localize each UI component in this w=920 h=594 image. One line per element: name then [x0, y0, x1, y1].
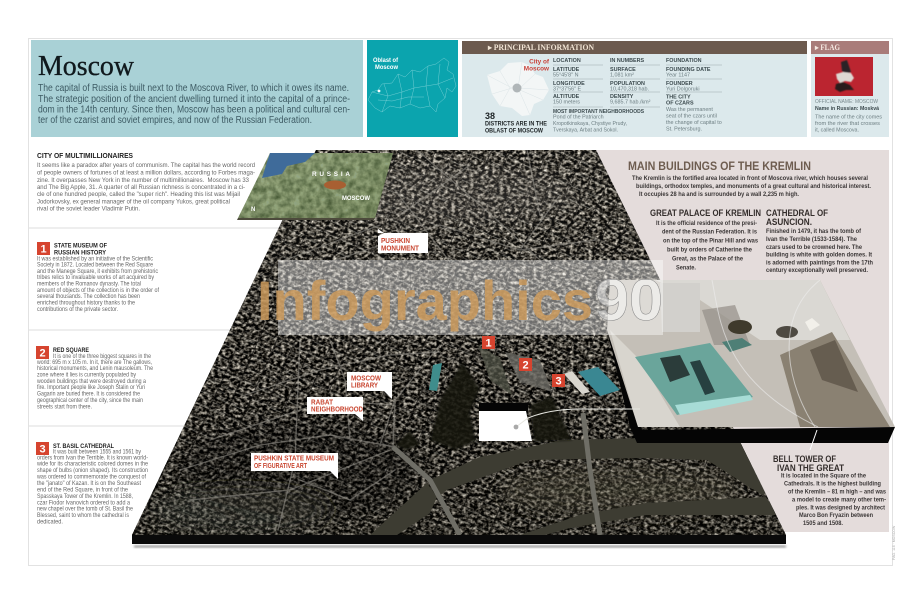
text block: state museum of Russian history: It was established by an initiative of the Scientific — [37, 256, 153, 262]
column: in numbers: 1,081 km² — [610, 72, 634, 78]
column: location: Tverskaya, Arbat and Sokol. — [553, 128, 618, 134]
map label: Moscow Library: MOSCOW — [351, 376, 381, 382]
map base block — [132, 535, 786, 548]
column: in numbers: 10,470,318 hab. — [610, 86, 649, 92]
heading bar: ▸ FLAG — [814, 43, 840, 52]
map marker 3 — [552, 374, 565, 388]
water — [262, 153, 315, 178]
map: oblast of Moscow districts: City of — [529, 58, 550, 66]
text block: Cathedral of Asuncion: building is white with golden domes. It — [766, 252, 873, 258]
text block: Great Palace of Kremlin: built by orders of Catherine the — [667, 246, 752, 254]
text block: city of multimillionaires: It seems like a paradox after years of communism. The capital has the world record — [37, 162, 255, 169]
Cathedral cluster — [728, 320, 752, 334]
text block: red square: streets start from there. — [37, 404, 92, 410]
text block: state museum of Russian history: enriched throughout history thanks to the — [37, 300, 136, 306]
text block: city of multimillionaires — [37, 151, 255, 212]
panel: oblast of Moscow locator map — [367, 40, 458, 137]
text block: city of multimillionaires: rival of the soviet leader Vladimir Putin. — [37, 206, 140, 212]
text block: red square: Gagarin are buried there. It is considered the — [37, 392, 141, 398]
heading bar: ▸ PRINCIPAL INFORMATION — [487, 43, 594, 52]
text block: state museum of Russian history: contributions of the private sector. — [37, 307, 118, 313]
column: in numbers: IN NUMBERS — [610, 58, 645, 64]
text block: St. Basil cathedral: shape of bulbs (onion shaped). Its construction — [37, 468, 148, 474]
text block: St. Basil cathedral: orders from Ivan the Terrible. It is known world- — [37, 456, 148, 462]
text block: Great Palace of Kremlin: GREAT PALACE OF KREMLIN — [650, 208, 761, 218]
panel: oblast of Moscow locator map: Oblast of — [373, 58, 399, 64]
text block: Great Palace of Kremlin: dent of the Russian Federation. It is — [662, 228, 757, 236]
text block: red square — [36, 346, 154, 410]
map label: Pushkin State Museum: OF FIGURATIVE ART — [254, 463, 308, 470]
flag text: The name of the city comes — [815, 114, 882, 120]
map label: Pushkin Monument: PUSHKIN — [381, 238, 410, 245]
text block: city of multimillionaires: zine. It overpasses New York in the number of multimillionaires. Moscow has 33 — [37, 177, 249, 184]
map marker 2 — [519, 358, 532, 372]
map marker 3: 3 — [555, 376, 562, 388]
inset black side — [607, 330, 895, 443]
text block: St. Basil cathedral: czar Fiodor Ivanovich ordered to add a — [37, 500, 131, 506]
map label: Pushkin State Museum — [251, 453, 338, 479]
text block: Bell Tower of Ivan the Great: ples. It was designed by architect — [796, 504, 886, 512]
text block: state museum of Russian history: and the Manege Square, it exhibits from prehistoric — [37, 269, 158, 275]
column: in numbers: POPULATION — [610, 81, 645, 87]
text block: Cathedral of Asuncion: is adorned with paintings from the 17th — [766, 260, 873, 266]
text block: St. Basil cathedral — [36, 442, 149, 526]
districts count: OBLAST OF MOSCOW — [485, 128, 543, 134]
map: oblast of Moscow districts — [487, 58, 550, 116]
text block: Cathedral of Asuncion: Finished in 1479, it has the tomb of — [766, 228, 862, 235]
column: location: 150 meters — [553, 100, 580, 106]
flag text: OFFICIAL NAME: MOSCOW — [815, 99, 879, 105]
text block: state museum of Russian history: Society in 1872. Located between the Red Square — [37, 262, 154, 268]
text block: Cathedral of Asuncion: CATHEDRAL OF — [766, 208, 828, 218]
icon: number 2: 2 — [39, 348, 46, 360]
text block: Bell Tower of Ivan the Great: of the Kremlin – 81 m high – and was — [788, 488, 886, 496]
intro text: ter of the czarist and soviet empires, and now of the Russian Federation. — [38, 115, 312, 126]
text block: city of multimillionaires: cle of one hundred people, called the "super rich". Heading this list was Mijail — [37, 191, 240, 198]
column: foundation: FOUNDATION — [666, 58, 702, 64]
text block: Kremlin intro: The Kremlin is the fortified area located in front of Moscova river, which houses several — [632, 175, 868, 182]
column: location: 55°45′8″ N — [553, 72, 579, 78]
text block: St. Basil cathedral: wide for its characteristic colored domes in the — [36, 462, 149, 468]
watermark: Infographics — [257, 269, 593, 332]
map label: Pushkin Monument — [378, 229, 428, 253]
text block: state museum of Russian history: RUSSIAN HISTORY — [54, 250, 107, 256]
text block: Kremlin intro: It occupies 28 ha and is surrounded by a wall 2,235 m high. — [639, 191, 799, 198]
intro text: The capital of Russia is built next to the Moscova River, to which it owes its name. — [38, 83, 349, 94]
heading bar — [462, 41, 807, 54]
map label: Pushkin State Museum: PUSHKIN STATE MUSEUM — [254, 456, 334, 462]
icon: Moscow flag — [815, 57, 873, 96]
streets — [180, 150, 596, 530]
column: foundation — [666, 58, 722, 132]
text block: St. Basil cathedral: dedicated. — [37, 520, 63, 526]
watermark — [257, 245, 663, 335]
watermark: 90 — [595, 268, 663, 333]
watermark: Infographics — [268, 245, 608, 308]
text block: Cathedral of Asuncion — [766, 208, 873, 274]
text block: Kremlin intro — [632, 175, 871, 198]
column: foundation: OF CZARS — [666, 100, 694, 106]
intro text — [38, 83, 350, 126]
column: foundation: Year 1147 — [666, 72, 690, 78]
text block: Bell Tower of Ivan the Great: Marco Bon Fryazin between — [799, 512, 873, 519]
text block: Bell Tower of Ivan the Great: BELL TOWER OF — [773, 454, 836, 464]
header panel: intro — [31, 40, 363, 137]
Russia location inset — [236, 150, 396, 220]
column: foundation: Yuri Dolgoruki — [666, 86, 700, 92]
text block: state museum of Russian history: members of the Romanov dynasty. The total — [37, 282, 141, 288]
text block: state museum of Russian history: tribes relics to invaluable works of art acquired by — [37, 275, 154, 281]
icon: number 1: 1 — [40, 244, 47, 256]
text block: city of multimillionaires: Jodorkovsky, ex general manager of the oil company Yukos, great political — [37, 198, 230, 206]
text block: city of multimillionaires: of people owners of fortunes of at least a million dollars, according to Forbes maga- — [37, 170, 255, 176]
map label: Moscow Library — [347, 372, 392, 399]
text block: St. Basil cathedral: was ordered to commemorate the conquest of — [36, 474, 146, 480]
icon: number 3: 3 — [39, 444, 46, 456]
Great Palace green roofs — [635, 338, 753, 415]
icon: Russia outline map — [368, 58, 456, 112]
map label: Pushkin Monument: MONUMENT — [381, 246, 420, 252]
column: location: 37°37′56″ E — [553, 86, 582, 92]
text block: Cathedral of Asuncion: Ivan the Terrible (1533-1584). The — [766, 236, 857, 243]
text block: Bell Tower of Ivan the Great: Cathedrals. It is the highest building — [784, 480, 881, 488]
column: location: ALTITUDE — [553, 94, 580, 100]
column: in numbers: 9,685.7 hab./km² — [610, 100, 651, 106]
intro text: dom in the 14th century. Since then, Moscow has been a political and cultural cen- — [38, 104, 350, 116]
bridges — [393, 413, 600, 535]
Kremlin aerial inset — [600, 280, 900, 443]
column: in numbers: DENSITY — [610, 94, 634, 100]
text block: St. Basil cathedral: Blessed, saint to whom the cathedral is — [37, 513, 129, 519]
text block: state museum of Russian history: amount of objects of the collection is in the order of — [37, 288, 159, 294]
text block: Bell Tower of Ivan the Great — [773, 454, 886, 527]
text block: red square: world: 695 m x 105 m. In it, there are The gallows, — [36, 360, 152, 366]
column: location: LONGITUDE — [553, 81, 585, 87]
text block: red square: historical monuments, and Lenin mausoleum. The — [37, 366, 154, 372]
text block: red square: zone where it lies is currently populated by — [37, 372, 136, 378]
flag text — [815, 99, 882, 134]
panel: principal information — [462, 41, 807, 137]
text block: red square: fire. Important people like Joseph Stalin or Yuri — [37, 385, 145, 391]
map label: Rabat neighborhood: NEIGHBORHOOD — [311, 406, 363, 414]
pools and teal roofs — [429, 363, 620, 396]
column: location: LATITUDE — [553, 67, 580, 73]
map marker 1 — [482, 336, 495, 350]
text block: St. Basil cathedral: new chapel over the tomb of St. Basil the — [37, 506, 134, 512]
text block: St. Basil cathedral: Spasskaya Tower of the Kremlin. In 1588, — [37, 494, 133, 500]
column: foundation: FOUNDING DATE — [666, 67, 711, 73]
text block: St. Basil cathedral: end of the Red Square, in front of the — [37, 488, 129, 494]
label: Moscow: MOSCOW — [342, 196, 370, 202]
flag text: from the river that crosses — [815, 121, 880, 127]
text block: St. Basil cathedral: ST. BASIL CATHEDRAL — [53, 443, 114, 450]
text block: Bell Tower of Ivan the Great: a model to create many other tem- — [792, 496, 886, 504]
text block: state museum of Russian history — [37, 242, 159, 313]
flag text: Name in Russian: Moskvá — [815, 106, 880, 112]
intro text: The strategic position of the ancient dwelling turned it into the capital of a prince- — [38, 94, 350, 105]
bell tower leader line — [810, 430, 817, 450]
panel: flag — [811, 41, 889, 137]
panel: oblast of Moscow locator map: Moscow — [375, 65, 398, 71]
text block: state museum of Russian history: STATE MUSEUM OF — [54, 242, 107, 250]
text block: city of multimillionaires: CITY OF MULTIMILLIONAIRES — [37, 151, 133, 160]
label: Russia: RUSSIA — [312, 171, 350, 178]
text block: Bell Tower of Ivan the Great: 1505 and 1508. — [803, 520, 843, 527]
map label: Rabat neighborhood — [307, 397, 363, 421]
column: location: MOST IMPORTANT NEIGHBORHOODS — [553, 109, 644, 115]
text block: red square: RED SQUARE — [53, 347, 89, 354]
map label: Rabat neighborhood: RABAT — [311, 400, 334, 406]
text block: Kremlin intro: buildings, orthodox temples, and monuments of a great cultural and historical interest. — [636, 183, 871, 190]
aerial map of Moscow — [130, 150, 790, 548]
text block: Cathedral of Asuncion: century exceptionally well preserved. — [766, 267, 868, 274]
river Moscova — [370, 438, 778, 535]
text block: St. Basil cathedral: It was built between 1555 and 1561 by — [53, 450, 141, 456]
column: in numbers: SURFACE — [610, 67, 636, 73]
text block: red square: geographical center of the city, since the main — [37, 398, 143, 404]
white gap marking the Kremlin location — [479, 403, 640, 441]
column: location: Kropotkinskaya, Chystiye Prudy, — [553, 121, 627, 127]
text block: Cathedral of Asuncion: czars used to be crowned here. The — [766, 244, 862, 251]
parks around the Kremlin — [395, 362, 572, 450]
map label: Moscow Library: LIBRARY — [351, 382, 378, 390]
districts count: 38 — [485, 111, 495, 121]
text block: Great Palace of Kremlin: on the top of the Pinar Hill and was — [663, 238, 758, 244]
column: foundation: FOUNDER — [666, 81, 693, 87]
text block: Bell Tower of Ivan the Great: It is located in the Square of the — [781, 472, 866, 480]
districts count: DISTRICTS ARE IN THE — [485, 122, 547, 128]
map marker 2: 2 — [522, 360, 529, 372]
flag text: it, called Moscova. — [815, 128, 859, 134]
column: location — [553, 58, 644, 134]
panel: Kremlin background — [596, 150, 889, 532]
text block: red square: It is one of the three biggest squares in the — [53, 354, 152, 360]
column: foundation: St. Petersburg. — [666, 126, 702, 132]
heading: main buildings of the Kremlin: MAIN BUILDINGS OF THE KREMLIN — [628, 161, 811, 173]
title: Moscow — [38, 50, 134, 82]
text block: Bell Tower of Ivan the Great: IVAN THE GREAT — [777, 463, 844, 473]
map marker 1: 1 — [485, 338, 492, 350]
districts count — [485, 111, 547, 134]
Red Square area — [505, 352, 552, 392]
column: in numbers — [610, 58, 660, 107]
map tonal areas — [150, 165, 740, 532]
text block: city of multimillionaires: and The Big Apple, 31. A quarter of all Russian richness is concentrated in a ci- — [37, 184, 245, 191]
text block: Great Palace of Kremlin: Senate. — [676, 264, 696, 272]
text block: Great Palace of Kremlin: It is the official residence of the presi- — [656, 220, 757, 227]
column: foundation: the change of capital to — [666, 120, 722, 126]
column: foundation: seat of the czars until — [666, 114, 717, 120]
leader line — [516, 409, 640, 427]
credit line: PAG. 116 · MOSCOW — [892, 525, 896, 560]
map: oblast of Moscow districts: Moscow — [524, 66, 549, 72]
column: location: LOCATION — [553, 58, 581, 64]
column: foundation: THE CITY — [666, 94, 691, 100]
label: north: N — [251, 207, 255, 213]
text block: Great Palace of Kremlin — [650, 208, 761, 272]
text block: St. Basil cathedral: the "janato" of Kazan. It is on the Southeast — [37, 481, 141, 487]
column: foundation: Was the permanent — [666, 107, 713, 113]
column: location: Pond of the Patriarch — [553, 114, 604, 120]
text block: Cathedral of Asuncion: ASUNCION. — [766, 217, 812, 227]
text block: red square: wooden buildings that were destroyed during a — [36, 379, 147, 385]
text block: Great Palace of Kremlin: Great, as the Palace of the — [672, 256, 743, 262]
text block: state museum of Russian history: several thousands. The collection has been — [37, 294, 140, 300]
